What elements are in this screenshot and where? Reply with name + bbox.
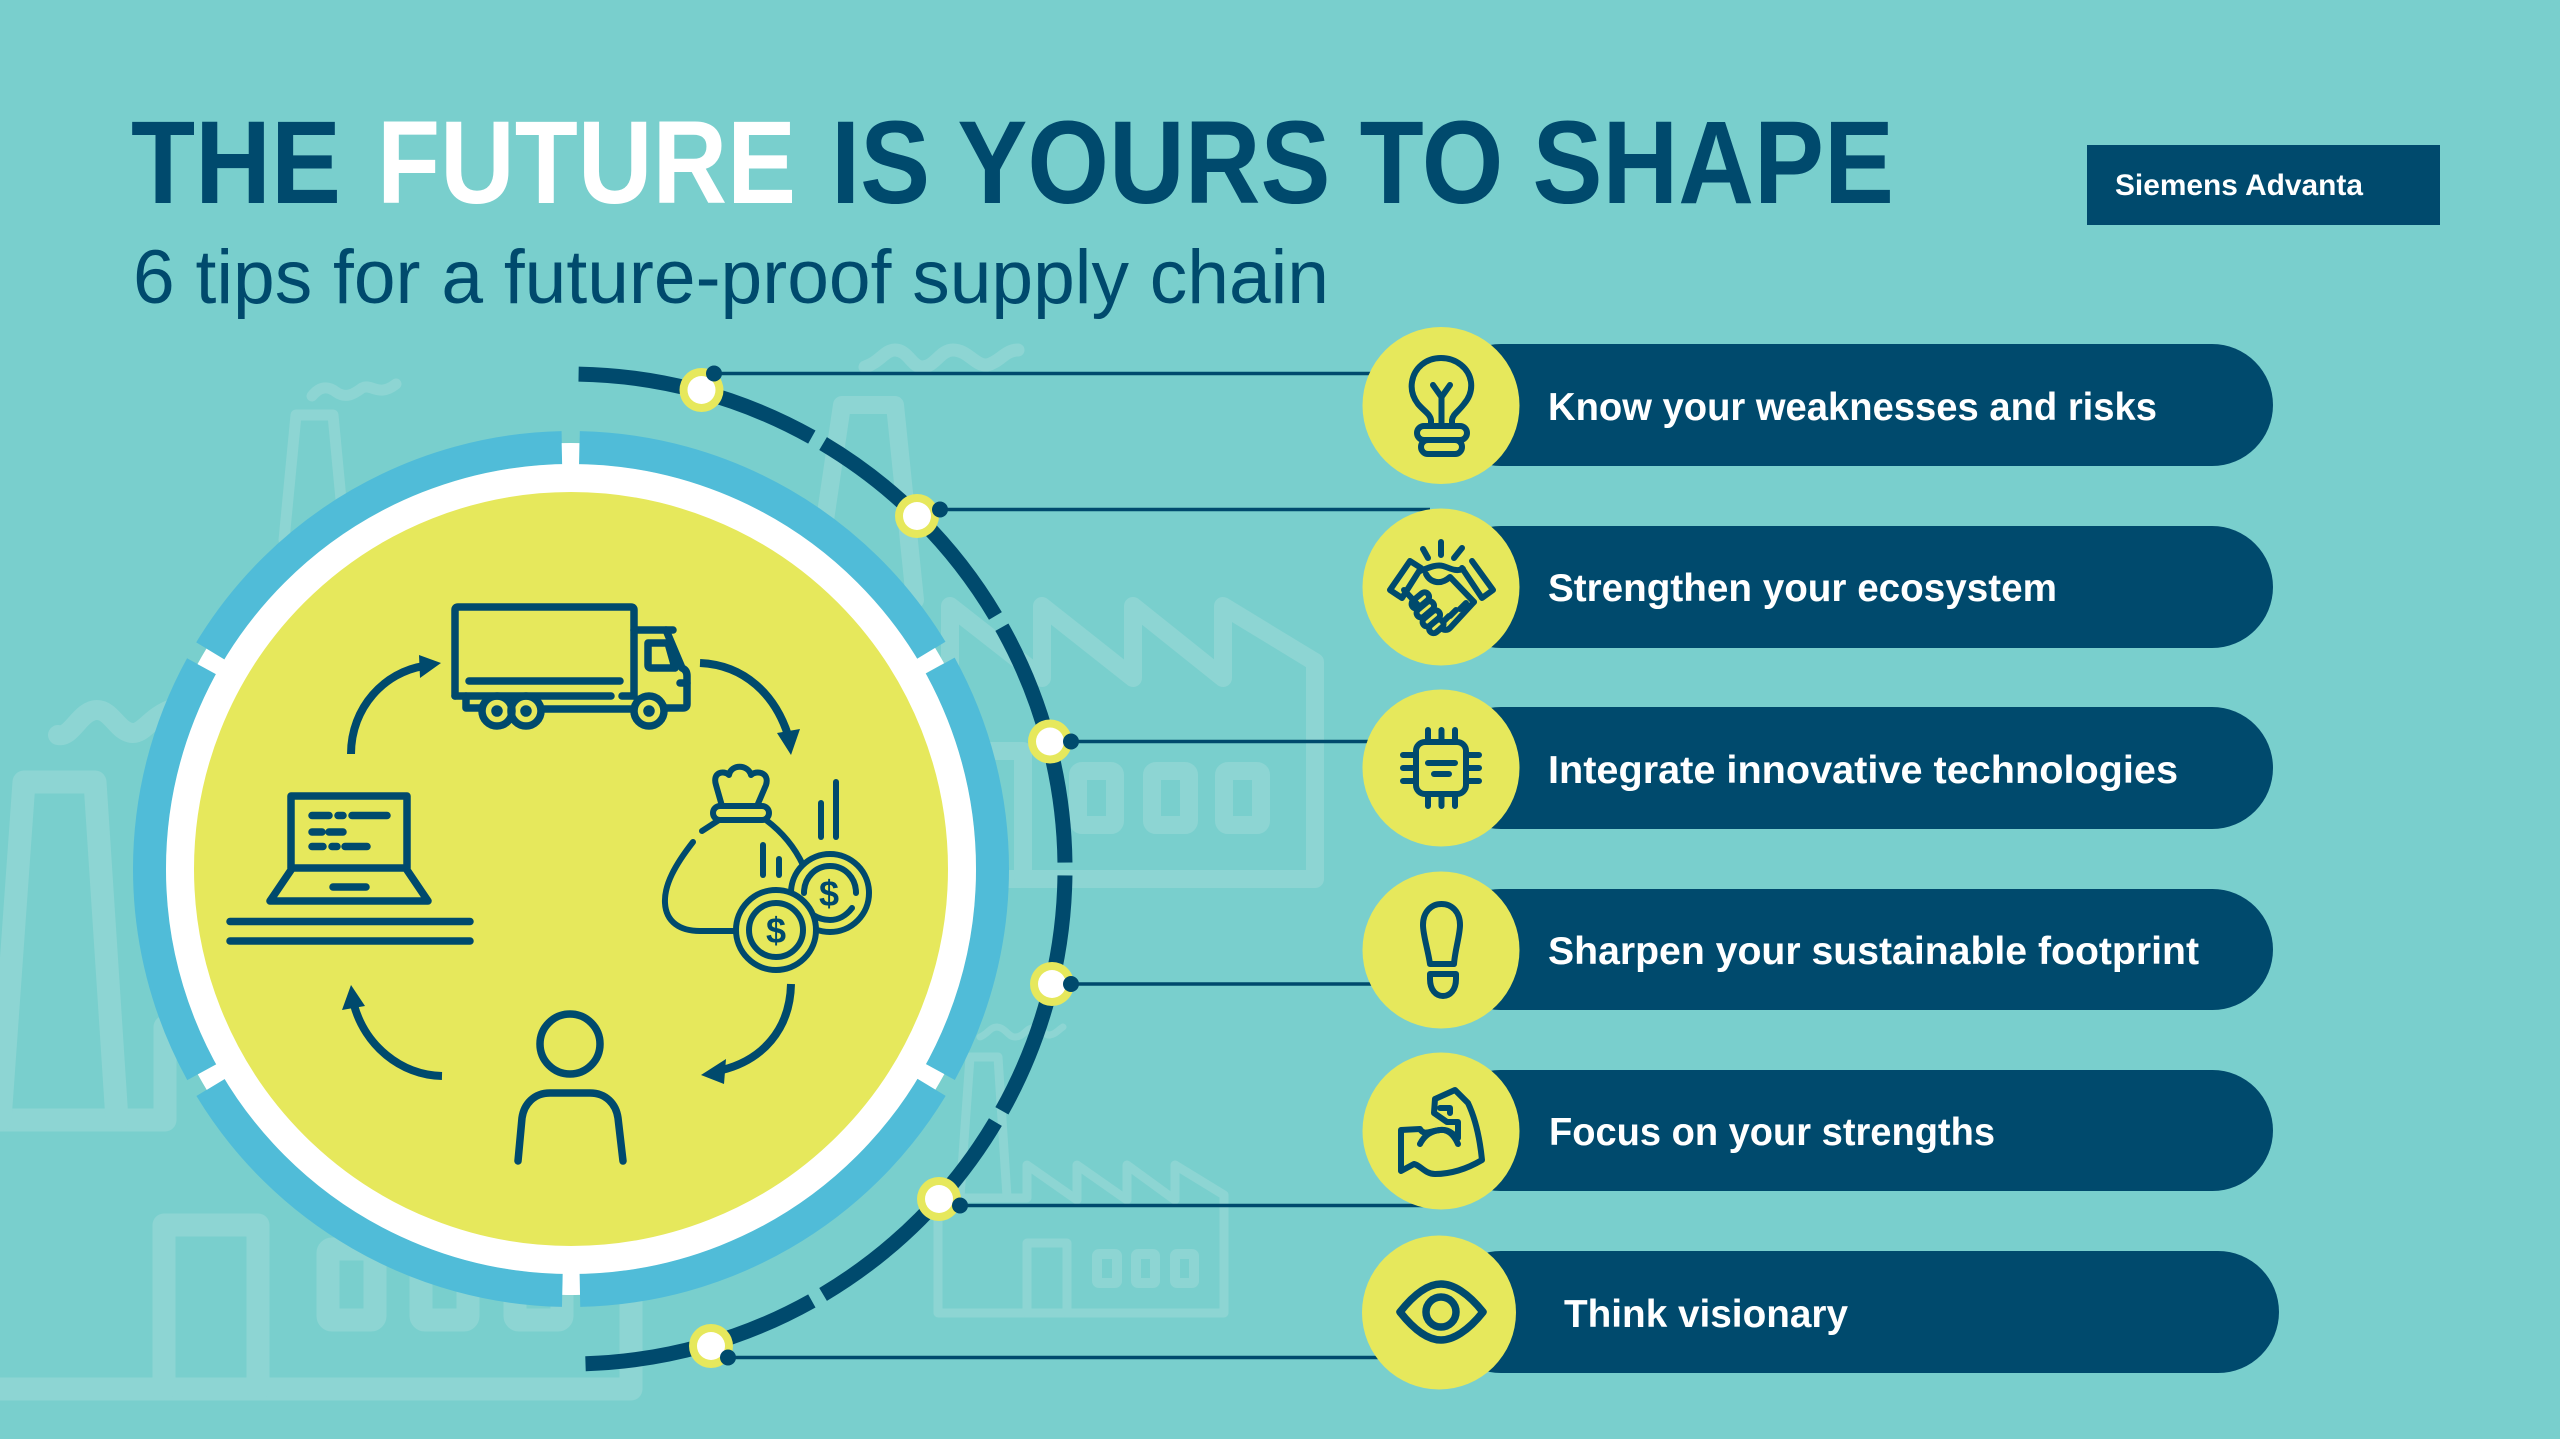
node 1 <box>680 366 724 412</box>
tip 5: Focus on your strengths <box>1362 1052 2273 1210</box>
arrow: laptop to truck <box>351 655 441 754</box>
icon: footprint <box>1423 904 1460 996</box>
icon circle 3 <box>1362 690 1520 846</box>
arrow: person to laptop <box>342 985 442 1076</box>
icon circle 4 <box>1362 872 1520 1028</box>
pill 2 <box>1440 526 2273 648</box>
background factory: large left <box>0 708 631 1389</box>
node 6 <box>689 1324 736 1368</box>
label 6: Think visionary <box>1564 1293 1848 1336</box>
pill 3 <box>1440 707 2273 829</box>
blue segmented ring <box>150 448 992 1290</box>
main title: FUTURE <box>377 97 796 229</box>
icon: chip <box>1403 730 1479 806</box>
tip 3: Integrate innovative technologies <box>1362 690 2273 846</box>
pill 4 <box>1440 889 2273 1010</box>
label 4: Sharpen your sustainable footprint <box>1548 930 2199 973</box>
icon: flexed arm <box>1401 1090 1482 1174</box>
label 1: Know your weaknesses and risks <box>1548 386 2157 429</box>
main title: THE <box>131 97 341 229</box>
icon circle 1 <box>1362 327 1520 484</box>
pill 5 <box>1440 1070 2273 1191</box>
pill 6 <box>1440 1251 2279 1373</box>
cycle icon: laptop <box>230 796 470 941</box>
coin dollar signs: $ <box>819 873 839 914</box>
white ring tabs <box>156 454 986 1284</box>
icon: eye <box>1400 1284 1483 1340</box>
coin dollar signs <box>766 873 839 951</box>
pill 1 <box>1440 344 2273 466</box>
outer dark segmented arc <box>75 374 1065 1364</box>
tip 2: Strengthen your ecosystem <box>1362 508 2273 666</box>
background factory: small chimney top left <box>284 384 396 540</box>
node 5 <box>917 1177 968 1221</box>
tip 6: Think visionary <box>1362 1236 2279 1390</box>
badge: Siemens Advanta <box>2087 145 2440 225</box>
main title: IS YOURS TO SHAPE <box>831 97 1894 229</box>
icon circle 6 <box>1362 1236 1516 1390</box>
cycle icon: person <box>518 1014 623 1161</box>
badge: Siemens Advanta: Siemens Advanta <box>2115 169 2363 202</box>
node 3 <box>1028 720 1079 764</box>
label 3: Integrate innovative technologies <box>1548 749 2178 792</box>
icon: handshake <box>1390 542 1493 635</box>
cycle icon: money bag with coins <box>665 767 869 970</box>
white ring <box>180 478 962 1260</box>
node 4 <box>1030 962 1079 1006</box>
main title <box>131 97 1894 229</box>
coin dollar signs: $ <box>766 910 786 951</box>
tip 4: Sharpen your sustainable footprint <box>1362 872 2273 1028</box>
icon: light bulb <box>1412 358 1471 454</box>
icon circle 2 <box>1362 508 1520 666</box>
background factory: upper right <box>825 350 1315 879</box>
subtitle: 6 tips for a future-proof supply chain <box>133 235 1329 320</box>
label 5: Focus on your strengths <box>1549 1111 1995 1154</box>
background factory: lower right <box>938 1027 1224 1313</box>
central circle <box>150 448 992 1290</box>
node 2 <box>895 494 948 538</box>
label 2: Strengthen your ecosystem <box>1548 567 2057 610</box>
arrow: money to person <box>701 984 791 1084</box>
arrow: truck to money <box>700 663 800 755</box>
connector lines <box>714 374 1430 1358</box>
icon circle 5 <box>1362 1052 1520 1210</box>
cycle icon: truck <box>455 607 687 726</box>
tip 1: Know your weaknesses and risks <box>1362 327 2273 484</box>
